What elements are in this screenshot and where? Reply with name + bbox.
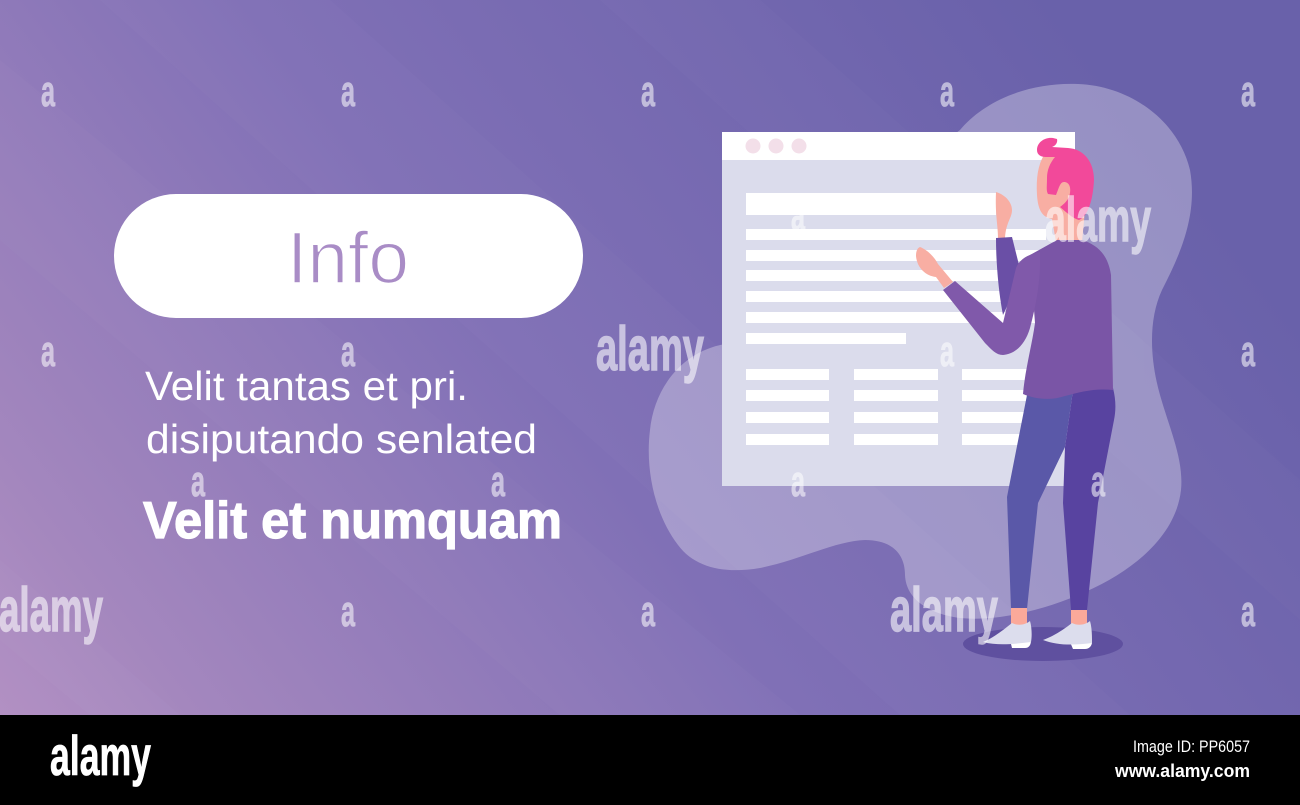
small watermark letters: a (191, 457, 205, 506)
right shoe (1043, 621, 1092, 649)
small watermark letters: a (491, 457, 505, 506)
large watermark words: alamy (0, 576, 103, 645)
small watermark letters (41, 67, 1255, 636)
window body (722, 132, 1075, 486)
large watermark words (0, 186, 1151, 645)
left shoe (983, 621, 1032, 648)
pointing hand (916, 247, 953, 288)
small watermark letters: a (641, 67, 655, 116)
hair (1037, 138, 1094, 220)
large watermark words: alamy (1045, 186, 1151, 255)
body text (145, 363, 537, 462)
organic blob behind the window (649, 84, 1192, 619)
person standing at the window (916, 138, 1123, 661)
right leg (1063, 388, 1115, 610)
small watermark letters: a (341, 67, 355, 116)
large watermark words: alamy (890, 576, 998, 645)
large watermark words: alamy (596, 315, 704, 384)
content text lines (746, 229, 1046, 344)
small watermark letters: a (1241, 67, 1255, 116)
sweater torso (1023, 240, 1113, 399)
small watermark letters: a (1241, 587, 1255, 636)
content heading bar (746, 193, 996, 215)
footer logo: alamy (50, 724, 151, 787)
website: www.alamy.com (1114, 761, 1250, 781)
small watermark letters: a (641, 587, 655, 636)
window title bar (722, 132, 1075, 160)
ground shadow (963, 627, 1123, 661)
neck and face (1037, 150, 1086, 242)
left leg (1007, 390, 1073, 609)
pill label: Info (287, 218, 409, 299)
small watermark letters: a (791, 191, 805, 240)
window control dots (746, 138, 806, 154)
small watermark letters: a (41, 327, 55, 376)
small watermark letters: a (341, 587, 355, 636)
bold tagline: Velit et numquam (143, 492, 562, 550)
small watermark letters: a (41, 67, 55, 116)
small watermark letters: a (940, 67, 954, 116)
body text: disiputando senlated (146, 416, 537, 462)
info pill (114, 194, 583, 318)
small watermark letters: a (341, 327, 355, 376)
footer bar (0, 715, 1300, 805)
sweater front sleeve (943, 252, 1040, 355)
browser window illustration (722, 132, 1075, 486)
small watermark letters: a (791, 457, 805, 506)
small watermark letters: a (1241, 327, 1255, 376)
body text: Velit tantas et pri. (145, 363, 468, 409)
ankles (1011, 608, 1087, 626)
back arm (996, 237, 1019, 315)
image id: Image ID: PP6057 (1133, 737, 1250, 756)
content columns (746, 369, 1042, 445)
small watermark letters: a (940, 327, 954, 376)
small watermark letters: a (1091, 457, 1105, 506)
raised hand (996, 192, 1012, 238)
